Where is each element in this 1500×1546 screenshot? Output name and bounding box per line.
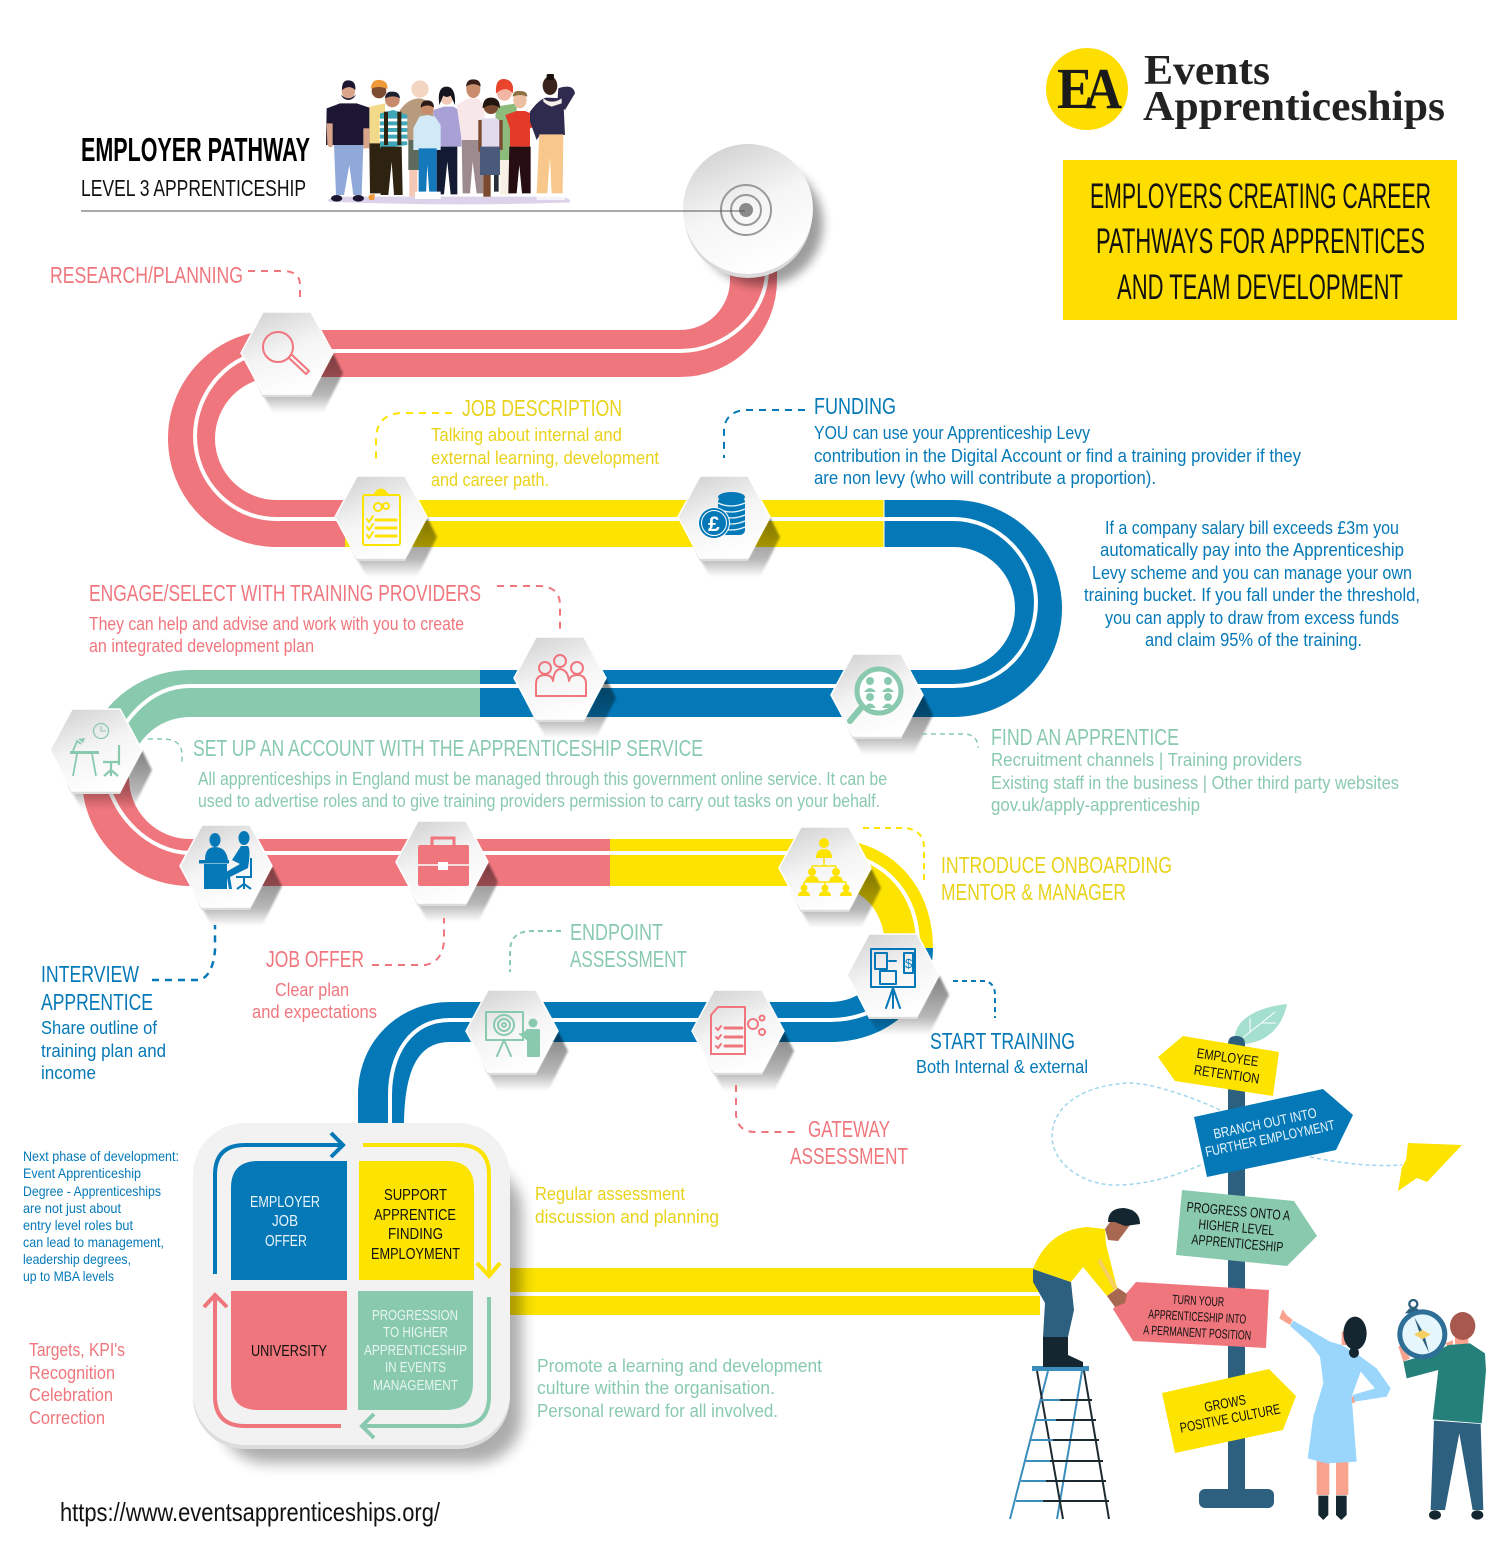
callout: set up account: used to advertise roles and to give training providers permission to carry out tasks on your behalf. [198, 791, 880, 811]
panel: development cycle: PROGRESSION [372, 1308, 458, 1324]
text block: next phase of development: entry level roles but [23, 1217, 133, 1233]
text block: next phase of development [23, 1148, 179, 1284]
icon: clipboard [363, 490, 400, 545]
callout: funding: YOU can use your Apprenticeship Levy [814, 423, 1090, 443]
callout: endpoint assessment: ENDPOINT [570, 919, 663, 945]
sign: employee retention: EMPLOYEE [1196, 1045, 1260, 1069]
callout: find an apprentice: Existing staff in the business | Other third party websites [991, 773, 1399, 793]
hexagon: research [241, 312, 343, 413]
callout: gateway assessment: GATEWAY [808, 1116, 890, 1142]
callout: job offer [252, 918, 444, 1022]
icon: magnifier with people [850, 669, 901, 721]
sign: branch out: BRANCH OUT INTO [1212, 1104, 1318, 1142]
callout: start training: Both Internal & external [916, 1057, 1088, 1077]
sign: positive culture: GROWS [1203, 1391, 1247, 1415]
icon: briefcase [418, 838, 469, 886]
sign: positive culture [1162, 1369, 1296, 1453]
callout: engage providers: ENGAGE/SELECT WITH TRAINING PROVIDERS [89, 580, 481, 606]
callout: funding: contribution in the Digital Account or find a training provider if they [814, 446, 1301, 466]
icon: interview [199, 831, 252, 889]
callout: find an apprentice: Recruitment channels | Training providers [991, 750, 1302, 770]
yellow banner [1063, 160, 1457, 320]
title [81, 131, 310, 201]
callout: onboarding: MENTOR & MANAGER [941, 879, 1126, 905]
panel: development cycle: APPRENTICE [374, 1207, 456, 1224]
callout: endpoint assessment: ASSESSMENT [570, 946, 687, 972]
illustration: man on ladder [1010, 1208, 1140, 1519]
text block: targets and recognition: Celebration [29, 1385, 113, 1405]
illustration: group of people [326, 74, 575, 204]
icon: magnifier [263, 332, 309, 374]
callout: start training: START TRAINING [930, 1028, 1075, 1054]
callout: interview apprentice: APPRENTICE [41, 989, 153, 1015]
logo: Apprenticeships [1143, 84, 1445, 130]
callout: find an apprentice: FIND AN APPRENTICE [991, 724, 1179, 750]
callout: job description: external learning, development [431, 448, 659, 468]
text block: targets and recognition: Targets, KPI's [29, 1340, 125, 1360]
hexagon: endpoint assessment [466, 990, 568, 1091]
callout: onboarding [863, 828, 1172, 905]
text block: next phase of development: Next phase of development: [23, 1148, 179, 1164]
panel: development cycle: EMPLOYMENT [371, 1246, 460, 1263]
callout: engage providers [89, 580, 560, 656]
target disc [683, 144, 823, 286]
logo [1046, 48, 1445, 130]
text block: levy explanation: training bucket. If you fall under the threshold, [1084, 585, 1420, 605]
pathway track [105, 255, 1038, 1130]
hexagon: set up account [50, 709, 152, 810]
text block: levy explanation: Levy scheme and you can manage your own [1092, 563, 1412, 583]
panel: development cycle: IN EVENTS [385, 1360, 446, 1376]
callout: start training [916, 981, 1088, 1077]
text block: next phase of development: up to MBA levels [23, 1268, 114, 1284]
callout: set up account: SET UP AN ACCOUNT WITH THE APPRENTICESHIP SERVICE [193, 735, 703, 761]
hexagon: onboarding [779, 827, 881, 928]
text block: regular assessment: Regular assessment [535, 1184, 685, 1204]
title rule [81, 210, 745, 212]
hexagon: start training [847, 934, 949, 1035]
text block: regular assessment [535, 1184, 719, 1227]
panel: development cycle: TO HIGHER [383, 1325, 448, 1341]
callout: job description [376, 395, 659, 490]
text block: next phase of development: Event Apprenticeship [23, 1165, 141, 1181]
panel: development cycle: UNIVERSITY [251, 1343, 327, 1360]
title: LEVEL 3 APPRENTICESHIP [81, 175, 306, 201]
hexagon: interview [180, 825, 282, 926]
icon: organisation chart [798, 838, 852, 896]
hexagon: funding [678, 476, 780, 577]
text block: targets and recognition [29, 1340, 125, 1428]
signpost [1113, 1004, 1353, 1508]
icon: paper plane [1398, 1143, 1462, 1191]
sign: employee retention [1158, 1036, 1279, 1096]
icon: coins: £ [708, 513, 720, 536]
sign: branch out [1194, 1089, 1353, 1177]
text block: learning culture: Personal reward for all involved. [537, 1401, 778, 1421]
sign: employee retention: RETENTION [1193, 1062, 1260, 1087]
dashed flight path [1052, 1083, 1402, 1185]
text block: next phase of development: Degree - Apprenticeships [23, 1183, 161, 1199]
callout: job description: and career path. [431, 470, 549, 490]
logo: Events [1144, 48, 1270, 94]
text block: levy explanation: and claim 95% of the training. [1145, 630, 1362, 650]
sign: permanent position: TURN YOUR [1172, 1292, 1225, 1309]
hexagon: gateway assessment [692, 990, 794, 1091]
icon: group of three people [536, 655, 586, 696]
callout: set up account: All apprenticeships in England must be managed through this government online service. It can be [198, 769, 887, 789]
callout: job offer: and expectations [252, 1002, 377, 1022]
icon: presentation board [871, 949, 915, 1008]
text block: learning culture [537, 1356, 822, 1421]
illustration: woman pointing [1279, 1309, 1391, 1520]
callout: onboarding: INTRODUCE ONBOARDING [941, 852, 1172, 878]
hexagon: find an apprentice [831, 654, 933, 755]
icon: target presenter [486, 1012, 539, 1056]
callout: find an apprentice [922, 724, 1399, 815]
callout: interview apprentice: training plan and [41, 1041, 166, 1061]
panel: development cycle: FINDING [388, 1226, 443, 1243]
callout: job description: JOB DESCRIPTION [462, 395, 622, 421]
callout: funding [724, 393, 1301, 488]
callout: job offer: Clear plan [275, 980, 349, 1000]
panel: development cycle: EMPLOYER [250, 1194, 320, 1211]
sign: positive culture: POSITIVE CULTURE [1178, 1401, 1282, 1436]
sign: progress: APPRENTICESHIP [1191, 1231, 1284, 1255]
callout: endpoint assessment [510, 919, 687, 972]
yellow connector band [505, 1268, 1040, 1315]
hexagon: engage providers [514, 637, 616, 738]
callout: set up account [148, 735, 887, 811]
hexagon: job offer [396, 821, 498, 922]
panel: development cycle [193, 1123, 522, 1463]
text block: next phase of development: can lead to management, [23, 1234, 164, 1250]
text block: targets and recognition: Recognition [29, 1363, 115, 1383]
title: EMPLOYER PATHWAY [81, 131, 310, 168]
icon: coins [698, 492, 745, 539]
callout: interview apprentice [41, 925, 215, 1083]
sign: progress [1176, 1190, 1317, 1266]
callout: engage providers: They can help and advise and work with you to create [89, 614, 464, 634]
logo: A [1085, 56, 1122, 121]
hexagon: job description [335, 476, 437, 577]
panel: development cycle: MANAGEMENT [373, 1378, 458, 1394]
sign: permanent position: A PERMANENT POSITION [1143, 1322, 1252, 1343]
sign: progress: PROGRESS ONTO A [1186, 1199, 1291, 1224]
callout: interview apprentice: income [41, 1063, 96, 1083]
text block: regular assessment: discussion and planning [535, 1207, 719, 1227]
icon: presentation board: $ [905, 956, 913, 971]
callout: job offer: JOB OFFER [266, 946, 364, 972]
text block: levy explanation [1084, 518, 1420, 650]
text block: levy explanation: If a company salary bill exceeds £3m you [1105, 518, 1399, 538]
callout: gateway assessment: ASSESSMENT [790, 1143, 908, 1169]
callout: job description: Talking about internal and [431, 425, 622, 445]
text block: next phase of development: are not just about [23, 1200, 121, 1216]
callout: engage providers: an integrated development plan [89, 636, 314, 656]
icon: checklist and gears [711, 1007, 765, 1054]
website url: https://www.eventsapprenticeships.org/ [60, 1497, 441, 1527]
callout: research planning: RESEARCH/PLANNING [50, 262, 243, 288]
sign: branch out: FURTHER EMPLOYMENT [1204, 1116, 1337, 1160]
icon: desk and chair [70, 724, 119, 776]
panel: development cycle: SUPPORT [384, 1187, 447, 1204]
text block: learning culture: culture within the organisation. [537, 1378, 775, 1398]
text block: learning culture: Promote a learning and development [537, 1356, 822, 1376]
text block: targets and recognition: Correction [29, 1408, 105, 1428]
callout: interview apprentice: INTERVIEW [41, 961, 139, 987]
callout: interview apprentice: Share outline of [41, 1018, 158, 1038]
sign: permanent position [1113, 1282, 1269, 1348]
text block: levy explanation: you can apply to draw from excess funds [1105, 608, 1399, 628]
panel: development cycle: APPRENTICESHIP [364, 1343, 467, 1359]
panel: development cycle: JOB [272, 1213, 298, 1230]
callout: funding: are non levy (who will contribute a proportion). [814, 468, 1156, 488]
panel: development cycle: OFFER [265, 1233, 307, 1250]
text block: next phase of development: leadership degrees, [23, 1251, 131, 1267]
sign: permanent position: APPRENTICESHIP INTO [1148, 1306, 1247, 1327]
illustration: man with compass [1397, 1300, 1486, 1520]
callout: gateway assessment [736, 1085, 908, 1169]
logo: E [1057, 56, 1093, 121]
callout: funding: FUNDING [814, 393, 896, 419]
text block: levy explanation: automatically pay into the Apprenticeship [1100, 540, 1404, 560]
callout: find an apprentice: gov.uk/apply-apprenticeship [991, 795, 1200, 815]
sign: progress: HIGHER LEVEL [1198, 1216, 1275, 1238]
